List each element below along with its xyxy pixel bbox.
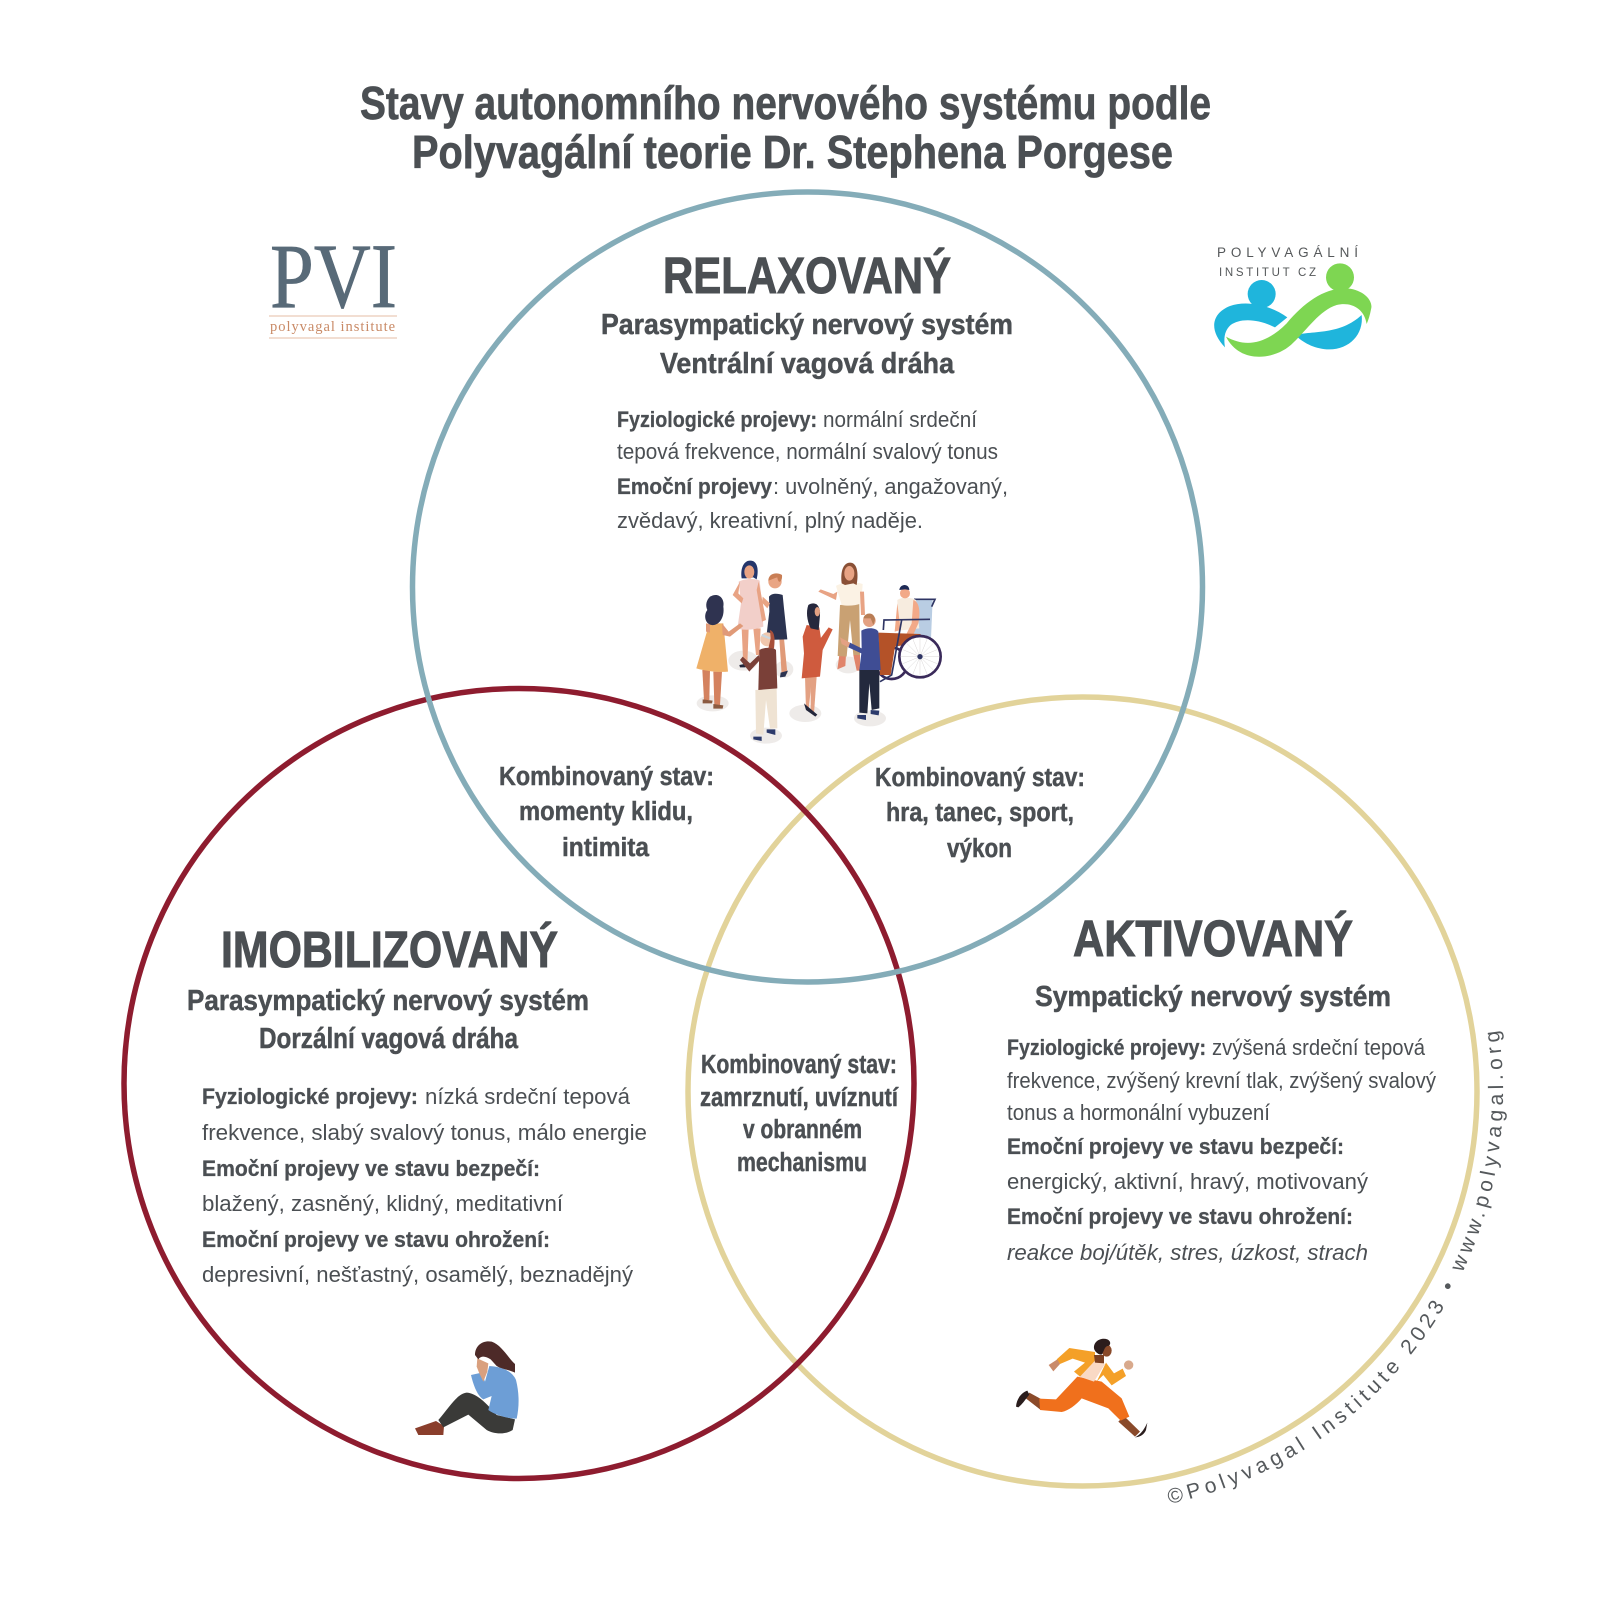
text block: projevy: [202, 1084, 647, 1287]
combined state: imobilizovaný + aktivovaný: v obranném: [743, 1116, 862, 1144]
circle: aktivovaný (gold): [688, 697, 1477, 1486]
text block: projevy: frekvence, zvýšený krevní tlak, zvýšený svalový: [1007, 1068, 1437, 1093]
text block: projevy: [617, 407, 1008, 533]
heading: relaxovaný: RELAXOVANÝ: [663, 246, 951, 304]
man with brown sweater: [755, 688, 777, 735]
text block: projevy: : uvolněný, angažovaný,: [773, 474, 1008, 499]
text block: projevy: Fyziologické projevy:: [202, 1084, 418, 1109]
text block: projevy: zvýšená srdeční tepová: [1212, 1035, 1425, 1060]
title: Polyvagální teorie Dr. Stephena Porgese: [412, 126, 1173, 178]
woman in pink dress: [742, 628, 749, 666]
title: Stavy autonomního nervového systému podle: [360, 77, 1211, 129]
text block: projevy: Emoční projevy: [617, 474, 772, 499]
text block: projevy: frekvence, slabý svalový tonus, málo energie: [202, 1120, 647, 1145]
logo: Polyvagální institut CZ: POLYVAGÁLNÍ: [1217, 245, 1358, 260]
logo: Polyvagální institut CZ: INSTITUT CZ: [1219, 267, 1316, 279]
combined state: imobilizovaný + aktivovaný: mechanismu: [737, 1149, 867, 1177]
combined state: relaxovaný + imobilizovaný: [499, 763, 714, 862]
heading: aktivovaný: AKTIVOVANÝ: [1073, 909, 1353, 967]
text block: projevy: reakce boj/útěk, stres, úzkost, strach: [1007, 1240, 1368, 1265]
panel: imobilizovaný: [187, 920, 647, 1435]
text block: projevy: Fyziologické projevy:: [617, 407, 817, 432]
subheading: systém a dráha: Dorzální vagová dráha: [259, 1023, 519, 1055]
combined state: relaxovaný + imobilizovaný: intimita: [562, 834, 650, 862]
subheading: systém a dráha: Ventrální vagová dráha: [660, 348, 955, 380]
panel: relaxovaný: [601, 246, 1013, 744]
text block: projevy: blažený, zasněný, klidný, meditativní: [202, 1191, 564, 1216]
combined state: relaxovaný + aktivovaný: hra, tanec, sport,: [886, 799, 1074, 827]
combined state: relaxovaný + aktivovaný: Kombinovaný stav:: [875, 764, 1085, 792]
combined state: relaxovaný + imobilizovaný: momenty klidu,: [519, 798, 693, 826]
curved copyright text: ©Polyvagal Institute 2023 • www.polyvagal.org: [1168, 1031, 1507, 1503]
text block: projevy: nízká srdeční tepová: [425, 1084, 630, 1109]
combined state: imobilizovaný + aktivovaný: [700, 1051, 899, 1177]
text block: projevy: energický, aktivní, hravý, motivovaný: [1007, 1169, 1369, 1194]
man in blue sweater: [859, 669, 879, 713]
title: [360, 77, 1211, 178]
panel: aktivovaný: [1007, 909, 1437, 1437]
woman in yellow dress: [702, 670, 710, 700]
circle: imobilizovaný (red): [124, 688, 914, 1478]
woman in black dress: [779, 638, 787, 675]
logo: Polyvagální institut CZ: [1214, 245, 1371, 357]
text block: projevy: tonus a hormonální vybuzení: [1007, 1100, 1271, 1125]
subheading: systém a dráha: Parasympatický nervový systém: [601, 309, 1013, 341]
combined state: imobilizovaný + aktivovaný: zamrznutí, uvíznutí: [700, 1084, 899, 1112]
logo: PVI: PVI: [270, 225, 397, 327]
circle: relaxovaný (blue): [412, 192, 1202, 982]
text block: projevy: Emoční projevy ve stavu bezpečí:: [202, 1156, 540, 1181]
illustration: group of people: [696, 561, 941, 744]
text block: projevy: Emoční projevy ve stavu bezpečí:: [1007, 1134, 1344, 1159]
woman in rust dress: [805, 677, 812, 710]
combined state: relaxovaný + aktivovaný: [875, 764, 1085, 863]
combined state: relaxovaný + imobilizovaný: Kombinovaný stav:: [499, 763, 714, 791]
text block: projevy: Emoční projevy ve stavu ohrožení:: [202, 1227, 550, 1252]
subheading: systém a dráha: [601, 309, 1013, 380]
text block: projevy: tepová frekvence, normální svalový tonus: [617, 439, 998, 464]
subheading: systém: Sympatický nervový systém: [1035, 981, 1391, 1013]
logo: PVI: polyvagal institute: [270, 319, 396, 335]
woman in white top: [837, 655, 860, 671]
text block: projevy: zvědavý, kreativní, plný naděje.: [617, 508, 923, 533]
heading: imobilizovaný: IMOBILIZOVANÝ: [221, 920, 558, 978]
illustration: running woman: [1016, 1339, 1147, 1437]
text block: projevy: depresivní, nešťastný, osamělý, beznadějný: [202, 1262, 634, 1287]
combined state: relaxovaný + aktivovaný: výkon: [947, 835, 1012, 863]
text block: projevy: [1007, 1035, 1437, 1265]
subheading: systém a dráha: [187, 985, 589, 1055]
wheelchair with man: [876, 648, 907, 679]
text block: projevy: Emoční projevy ve stavu ohrožení:: [1007, 1204, 1353, 1229]
illustration: seated woman: [415, 1341, 519, 1435]
text block: projevy: normální srdeční: [823, 407, 978, 432]
text block: projevy: Fyziologické projevy:: [1007, 1035, 1206, 1060]
subheading: systém a dráha: Parasympatický nervový systém: [187, 985, 589, 1017]
combined state: imobilizovaný + aktivovaný: Kombinovaný stav:: [701, 1051, 897, 1079]
